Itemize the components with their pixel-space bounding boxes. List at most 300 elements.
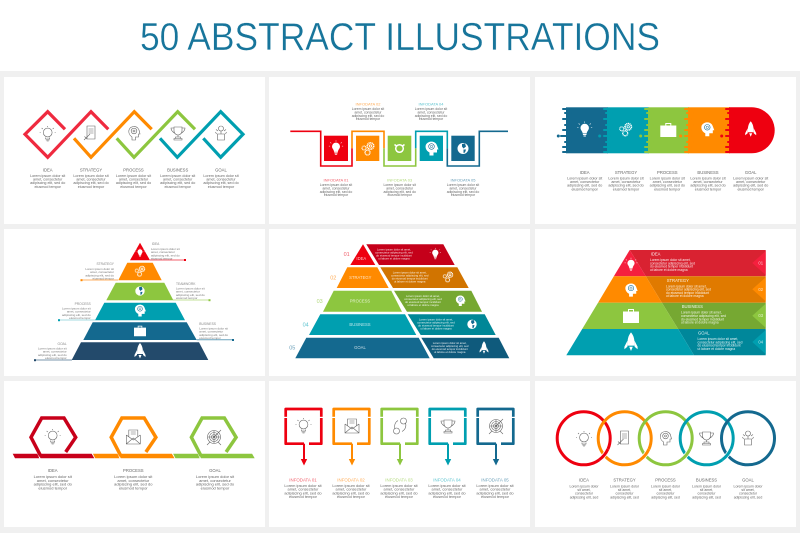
text: goal (734, 478, 763, 499)
text: infodata 04: amet, consectetur (432, 487, 463, 492)
icon: gears (443, 272, 453, 282)
text: process: eiusmod tempor (654, 187, 681, 191)
icon: plant (216, 126, 226, 140)
panel: diamond chain (4, 77, 265, 224)
text: infodata 01: adipiscing elit, sed do (320, 190, 352, 194)
icon: head (625, 283, 638, 297)
text: strategy: STRATEGY (613, 478, 636, 482)
icon: envelope (126, 430, 140, 444)
tier descriptions: Lorem ipsum dolor sit amet, (393, 270, 427, 274)
text: goal: amet, consectetur (199, 478, 232, 483)
square: blue (451, 136, 475, 161)
icon: notes (618, 431, 628, 445)
text: goal: GOAL (698, 331, 710, 336)
text: strategy: Lorem ipsum dolor sit (85, 267, 114, 271)
number tabs (752, 251, 766, 354)
text: process: Lorem ipsum dolor (651, 484, 681, 488)
icon: bulb (45, 429, 61, 444)
text: infodata 02: Lorem ipsum dolor sit (352, 107, 384, 111)
text: strategy: consectetur adipiscing elit, sed (666, 288, 711, 292)
text: strategy: ut labore et dolore magna (666, 294, 704, 298)
text: infodata 02: eiusmod tempor (337, 494, 366, 499)
text: process (116, 168, 151, 189)
text: strategy: STRATEGY (615, 170, 637, 175)
text: infodata 05: eiusmod tempor (481, 494, 510, 499)
text: infodata 04: eiusmod tempor (419, 117, 444, 121)
text: goal: eiusmod tempor (208, 185, 235, 189)
text: infodata 02: eiusmod tempor (356, 117, 381, 121)
tier descriptions: ut labore et dolore magna (378, 256, 410, 260)
icon: target (207, 430, 221, 445)
text: business: Lorem ipsum dolor sit (690, 176, 726, 180)
text: business: Lorem ipsum dolor sit amet, (681, 311, 722, 315)
icon: rocket (480, 341, 488, 354)
text: idea: eiusmod tempor (38, 485, 68, 490)
panel: stepped pyramid with callouts (4, 229, 265, 376)
tier numbers: 01 (344, 252, 350, 258)
text: business (681, 304, 726, 325)
panel: square timeline (269, 77, 530, 224)
text: idea: Lorem ipsum dolor sit (567, 176, 602, 180)
text: goal: consectetur adipiscing elit, sed (698, 340, 743, 344)
number tabs: 04 (758, 340, 764, 344)
text: process: PROCESS (123, 468, 144, 473)
text: business (199, 322, 228, 340)
text: infodata 01: Lorem ipsum dolor sit (320, 183, 352, 187)
text: idea: eiusmod tempor (571, 187, 599, 191)
text: strategy (608, 170, 644, 191)
text: business: amet, consectetur (693, 180, 723, 184)
text: business: sit amet, (700, 488, 713, 492)
pyramid tiers (72, 243, 208, 360)
text: idea: IDEA (48, 468, 58, 473)
text: goal: adipiscing elit, sed do (38, 353, 67, 357)
text: process (62, 302, 91, 320)
text: business: amet, consectetur (199, 330, 223, 334)
tier numbers (289, 252, 350, 352)
text: strategy: adipiscing elit, sed (610, 495, 639, 499)
text: idea: adipiscing elit, sed (570, 495, 598, 499)
text: infodata 02 (352, 102, 384, 121)
text: goal: adipiscing elit, sed do (203, 181, 239, 185)
text: strategy: do eiusmod tempor incididunt (666, 291, 709, 295)
right pyramid tiers (366, 244, 509, 358)
text: process: amet, consectetur (119, 178, 149, 182)
text: idea: sit amet, (577, 488, 591, 492)
text: infodata 01: eiusmod tempor (324, 193, 349, 197)
text: business: adipiscing elit, sed (692, 495, 721, 499)
tier descriptions: do eiusmod tempor incididunt (405, 300, 441, 304)
icon: bulb (329, 140, 343, 155)
frame: teal (428, 409, 468, 466)
icon: head (129, 127, 140, 140)
text: infodata 03: eiusmod tempor (388, 193, 413, 197)
text: infodata 02: Lorem ipsum dolor sit (332, 483, 371, 488)
text: process: amet, consectetur (67, 310, 91, 314)
icon: gears (362, 143, 374, 155)
text: goal: Lorem ipsum dolor sit (196, 474, 235, 479)
text: business: adipiscing elit, sed do (199, 333, 228, 337)
text: business: consectetur adipiscing elit, sed (681, 314, 726, 318)
text: idea: IDEA (580, 170, 590, 175)
text: business: Lorem ipsum dolor sit (160, 174, 195, 178)
text: process: adipiscing elit, sed do (114, 482, 153, 487)
panel: squares with arrows (269, 381, 530, 527)
icon: exchange (394, 418, 406, 434)
text: goal: amet, consectetur (43, 350, 67, 354)
tier descriptions: ut labore et dolore magna (420, 326, 452, 330)
text: infodata 02: adipiscing elit, sed do (352, 114, 384, 118)
square: orange (356, 136, 379, 161)
text: process: PROCESS (657, 170, 678, 175)
text: infodata 03: INFODATA 03 (387, 178, 413, 182)
text: strategy: amet, consectetur (90, 270, 114, 274)
text: teamwork (176, 282, 205, 300)
frame: green (380, 409, 420, 466)
tier labels: IDEA (356, 256, 366, 261)
text: infodata 03: Lorem ipsum dolor sit (383, 183, 416, 187)
icon: envelope (345, 419, 359, 433)
text: idea: IDEA (152, 242, 160, 246)
hexagon: red (13, 418, 94, 458)
frame: orange (332, 409, 372, 466)
icon: clock (394, 144, 404, 152)
text: idea: adipiscing elit, sed do (34, 482, 73, 487)
text: process: adipiscing elit, sed do (650, 184, 685, 188)
text: idea: do eiusmod tempor incididunt (650, 265, 693, 269)
text: infodata 03: amet, consectetur (384, 487, 415, 492)
tier numbers: 05 (289, 346, 295, 352)
text: infodata 02 (332, 477, 371, 499)
text: infodata 04: Lorem ipsum dolor sit (428, 483, 467, 488)
text: strategy: Lorem ipsum dolor sit (608, 176, 644, 180)
text: teamwork: amet, consectetur (176, 290, 200, 294)
icon: globe (135, 286, 145, 296)
tier numbers: 04 (303, 322, 309, 328)
tier descriptions: do eiusmod tempor incididunt (376, 254, 412, 258)
tier descriptions: consectetur adipiscing elit, sed (417, 320, 455, 324)
text: idea: amet, consectetur (151, 250, 175, 254)
text: process: Lorem ipsum dolor sit (116, 174, 151, 178)
text: process: eiusmod tempor (120, 185, 147, 189)
title: 50 ABSTRACT ILLUSTRATIONS (140, 16, 660, 59)
timeline line (290, 131, 508, 166)
text: teamwork: eiusmod tempor (176, 296, 198, 300)
text: strategy (666, 278, 711, 298)
text: strategy: consectetur (615, 492, 634, 496)
text: process (651, 478, 681, 499)
icon: bulb (625, 258, 637, 271)
leader lines (34, 259, 234, 361)
text: strategy (610, 478, 640, 499)
panel: split pyramid (269, 229, 530, 376)
icon: gears (620, 124, 631, 136)
text: infodata 03: INFODATA 03 (385, 477, 413, 482)
text: infodata 01: INFODATA 01 (324, 178, 349, 182)
tier descriptions: consectetur adipiscing elit, sed (431, 344, 469, 348)
tier labels (349, 256, 372, 350)
tier labels: BUSINESS (349, 322, 371, 327)
text: infodata 05: eiusmod tempor (451, 193, 476, 197)
text: strategy: eiusmod tempor (78, 185, 105, 189)
text: strategy (73, 168, 109, 189)
text: idea: Lorem ipsum dolor sit (151, 247, 180, 251)
text: goal: Lorem ipsum dolor sit (203, 174, 239, 178)
panel: interlocking rings (535, 381, 796, 527)
text: process: Lorem ipsum dolor sit (650, 176, 685, 180)
text: idea: amet, consectetur (570, 180, 600, 184)
text: strategy: Lorem ipsum dolor (610, 484, 640, 488)
text: goal: eiusmod tempor (45, 356, 67, 360)
text: business: BUSINESS (167, 168, 188, 172)
text: idea: eiusmod tempor (151, 257, 173, 261)
panel: overlapped pyramid bands (535, 229, 796, 376)
text: infodata 01: Lorem ipsum dolor sit (284, 483, 323, 488)
tier descriptions: ut labore et dolore magna (394, 280, 426, 284)
text: strategy: adipiscing elit, sed do (608, 184, 644, 188)
text: infodata 05: amet, consectetur (480, 487, 511, 492)
icon: bulb (577, 122, 592, 136)
tier descriptions: consectetur adipiscing elit, sed (391, 274, 429, 278)
text: business: eiusmod tempor (199, 336, 221, 340)
text: infodata 01: INFODATA 01 (289, 477, 317, 482)
text: process: adipiscing elit, sed do (116, 181, 151, 185)
text: strategy: adipiscing elit, sed do (73, 181, 109, 185)
text: infodata 01 (320, 178, 352, 197)
text: infodata 03: Lorem ipsum dolor sit (380, 483, 419, 488)
text: goal (196, 468, 235, 490)
text: goal: do eiusmod tempor incididunt (698, 344, 741, 348)
text: process: PROCESS (75, 302, 91, 306)
text: goal: consectetur (739, 492, 758, 496)
text: process (650, 170, 685, 191)
icon: briefcase (660, 123, 676, 137)
number tabs: 03 (758, 313, 764, 318)
icon: globe (458, 143, 468, 154)
text: idea: Lorem ipsum dolor sit (34, 474, 73, 479)
tier descriptions: do eiusmod tempor incididunt (392, 276, 428, 280)
text: idea: IDEA (651, 252, 661, 257)
tier descriptions: consectetur adipiscing elit, sed (375, 250, 413, 254)
text: infodata 04: Lorem ipsum dolor sit (415, 107, 447, 111)
text: infodata 05: adipiscing elit, sed do (476, 490, 514, 495)
text: infodata 03: adipiscing elit, sed do (383, 190, 416, 194)
text: strategy: eiusmod tempor (613, 187, 640, 191)
text: goal (698, 331, 743, 351)
icon: notes (84, 126, 95, 140)
text: idea (151, 242, 180, 261)
text: idea: IDEA (579, 478, 589, 482)
text: infodata 02: adipiscing elit, sed do (332, 490, 370, 495)
text: infodata 03: eiusmod tempor (385, 494, 414, 499)
text: idea: consectetur (575, 492, 594, 496)
text: business: BUSINESS (696, 478, 717, 482)
icon: head (135, 305, 146, 316)
text: idea: amet, consectetur (33, 178, 63, 182)
text: idea (567, 170, 602, 191)
text: business: BUSINESS (682, 304, 703, 309)
text: process (114, 468, 153, 490)
text: infodata 01 (284, 477, 323, 499)
text: strategy: STRATEGY (667, 278, 689, 283)
hexagon: orange (93, 418, 174, 458)
text: business: ut labore et dolore magna (681, 321, 719, 325)
square: teal (420, 136, 443, 161)
text: infodata 02: INFODATA 02 (356, 102, 381, 106)
text: goal: GOAL (215, 168, 227, 172)
text: goal: GOAL (745, 170, 757, 175)
panel: rounded colour band (535, 77, 796, 224)
text: infodata 05: amet, consectetur (450, 186, 477, 190)
segmented band (557, 107, 775, 153)
text: goal: eiusmod tempor (201, 485, 230, 490)
text: process: adipiscing elit, sed do (62, 313, 91, 317)
text: infodata 04 (428, 477, 467, 499)
icon: head (426, 142, 438, 156)
text: infodata 05 (476, 477, 515, 499)
icon: bulb (296, 418, 312, 433)
icon: globe (467, 320, 477, 329)
text: business: eiusmod tempor (164, 185, 192, 189)
icon: target (489, 419, 503, 434)
text: process: PROCESS (123, 168, 144, 172)
tier descriptions (375, 248, 469, 354)
square: green (388, 136, 411, 161)
text: goal: amet, consectetur (206, 178, 236, 182)
icon: trophy (700, 432, 714, 445)
icon: head (456, 296, 466, 306)
tier descriptions: ut labore et dolore magna (434, 350, 466, 354)
icon: bulb (430, 248, 441, 259)
tier descriptions: Lorem ipsum dolor sit amet, (419, 318, 453, 322)
text: process: Lorem ipsum dolor sit (114, 474, 153, 479)
text: goal: adipiscing elit, sed do (733, 184, 768, 188)
icon: briefcase (134, 326, 146, 336)
text: process: consectetur (656, 492, 675, 496)
text: infodata 03 (380, 477, 419, 499)
text: idea: adipiscing elit, sed do (30, 181, 65, 185)
text: strategy: Lorem ipsum dolor sit (73, 174, 109, 178)
icon: trophy (171, 127, 185, 140)
text: goal (203, 168, 239, 189)
text: strategy: Lorem ipsum dolor sit amet, (666, 284, 707, 288)
text: strategy: eiusmod tempor (92, 277, 114, 281)
number tabs: 01 (758, 260, 764, 266)
text: business: Lorem ipsum dolor sit (199, 326, 228, 330)
text: goal: Lorem ipsum dolor sit (38, 346, 67, 350)
rings (557, 412, 774, 465)
tier descriptions: consectetur adipiscing elit, sed (404, 297, 442, 301)
text: infodata 04 (415, 102, 447, 121)
text: goal: GOAL (209, 468, 221, 473)
tier numbers: 03 (317, 299, 323, 305)
icon: gears (135, 266, 145, 276)
icon: head (660, 432, 672, 445)
text: infodata 05: Lorem ipsum dolor sit (447, 183, 479, 187)
text: idea: Lorem ipsum dolor sit (30, 174, 65, 178)
panel: hexagons on a line (4, 381, 265, 527)
text: infodata 05: Lorem ipsum dolor sit (476, 483, 515, 488)
text: process: adipiscing elit, sed (651, 495, 680, 499)
icon: bulb (136, 248, 144, 257)
text: goal: adipiscing elit, sed (734, 495, 762, 499)
tier labels: STRATEGY (349, 275, 372, 280)
text: business: amet, consectetur (163, 178, 193, 182)
light pyramid (566, 250, 694, 355)
text: strategy: STRATEGY (96, 262, 115, 266)
text: idea: amet, consectetur (37, 478, 69, 483)
text: goal: adipiscing elit, sed do (196, 482, 235, 487)
tier labels: PROCESS (350, 298, 370, 304)
text: infodata 04: INFODATA 04 (419, 102, 444, 106)
text: teamwork: Lorem ipsum dolor sit (176, 286, 205, 290)
text: infodata 03: adipiscing elit, sed do (380, 490, 418, 495)
text: infodata 04: adipiscing elit, sed do (415, 114, 447, 118)
text: business: BUSINESS (697, 170, 719, 175)
icon: rocket (134, 343, 146, 358)
text: idea: eiusmod tempor (34, 185, 62, 189)
tier descriptions: Lorem ipsum dolor sit amet, (433, 341, 467, 345)
text: idea: Lorem ipsum dolor sit amet, (650, 258, 691, 262)
text: business: BUSINESS (199, 322, 217, 326)
text: business (690, 170, 726, 191)
text: goal (38, 342, 67, 360)
tier descriptions: do eiusmod tempor incididunt (418, 324, 454, 328)
text: goal: GOAL (58, 342, 67, 346)
text: process: amet, consectetur (117, 478, 150, 483)
text: infodata 01: amet, consectetur (288, 487, 319, 492)
text: process: PROCESS (655, 478, 676, 482)
text: infodata 02: INFODATA 02 (337, 477, 365, 482)
text: idea: consectetur adipiscing elit, sed (650, 261, 695, 265)
frame: red (284, 409, 324, 466)
square: red (324, 136, 348, 161)
text: strategy: amet, consectetur (611, 180, 641, 184)
tier descriptions: Lorem ipsum dolor sit amet, (406, 294, 440, 298)
text: goal: Lorem ipsum dolor sit amet, (698, 337, 738, 341)
text: idea (30, 168, 65, 189)
tier descriptions: Lorem ipsum dolor sit amet, (377, 248, 411, 252)
text: idea: adipiscing elit, sed do (567, 184, 602, 188)
text: idea: ut labore et dolore magna (650, 268, 688, 272)
text: infodata 05: adipiscing elit, sed do (447, 190, 479, 194)
text: infodata 04: INFODATA 04 (433, 477, 461, 482)
text: goal: GOAL (742, 478, 754, 482)
number tabs: 02 (758, 287, 764, 292)
text: business: adipiscing elit, sed do (160, 181, 195, 185)
text: infodata 05 (447, 178, 479, 197)
diamond chain graphic (25, 112, 243, 157)
text: infodata 01: eiusmod tempor (289, 494, 318, 499)
frame: blue (476, 409, 516, 466)
text: infodata 02: amet, consectetur (355, 110, 382, 114)
tier labels: GOAL (354, 345, 366, 350)
text: infodata 01: adipiscing elit, sed do (284, 490, 322, 495)
text: business (160, 168, 195, 189)
text: business: Lorem ipsum dolor (692, 484, 722, 488)
text: goal: amet, consectetur (736, 180, 766, 184)
text: idea: adipiscing elit, sed do (151, 253, 180, 257)
text: infodata 03 (383, 178, 416, 197)
text: goal (733, 170, 768, 191)
text: idea (650, 252, 695, 272)
text: infodata 04: amet, consectetur (418, 110, 445, 114)
text: process: Lorem ipsum dolor sit (62, 306, 91, 310)
icon: trophy (441, 420, 455, 433)
dark bands (630, 250, 766, 355)
text: strategy: sit amet, (618, 488, 631, 492)
icon: head (701, 122, 714, 136)
